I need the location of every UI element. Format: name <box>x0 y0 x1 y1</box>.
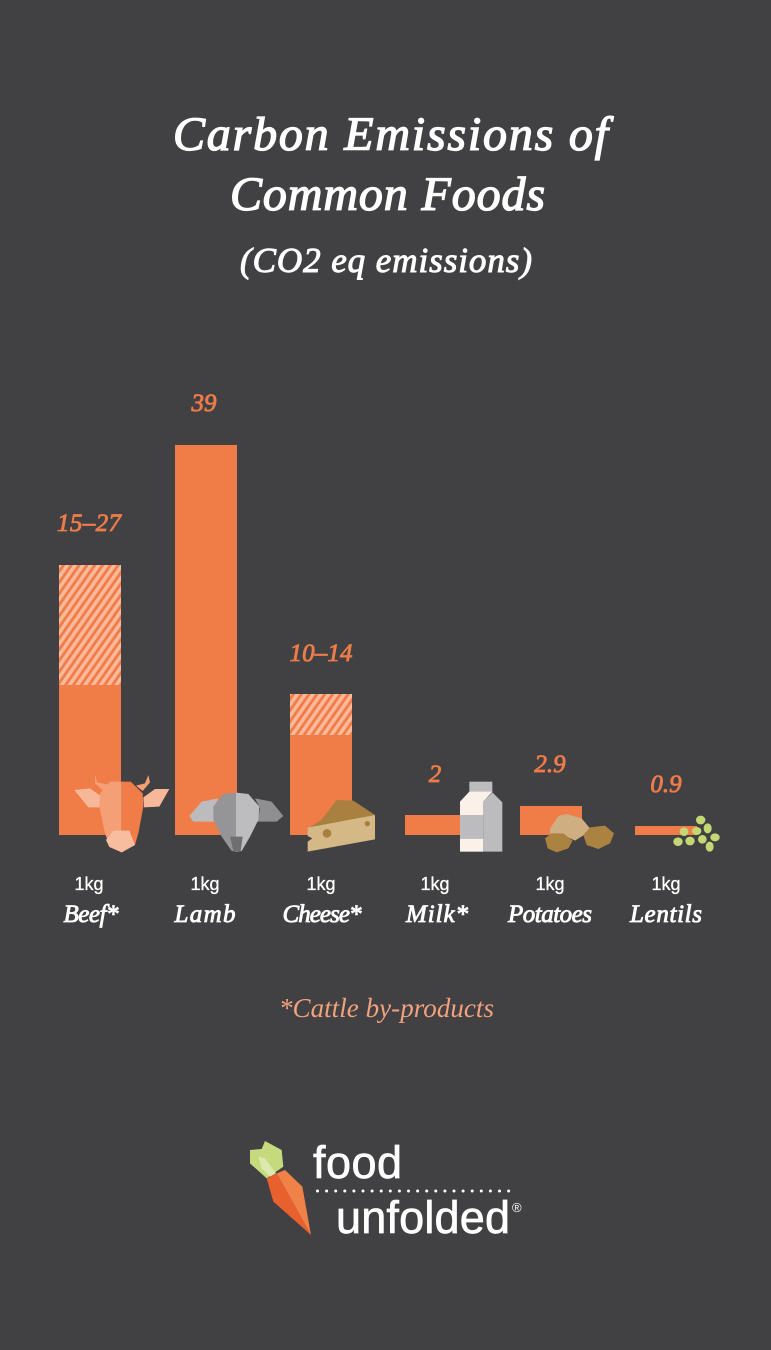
axis labels: Milk* <box>405 901 468 928</box>
icon: milk carton <box>460 782 502 852</box>
bar chart <box>57 390 697 835</box>
bar: milk <box>405 815 467 835</box>
value labels: 2 <box>429 761 441 788</box>
wordmark: food <box>313 1137 402 1188</box>
footnote: *Cattle by-products <box>279 993 494 1023</box>
axis labels: 1kg <box>535 874 565 894</box>
value labels: 2.9 <box>534 751 566 778</box>
axis labels: 1kg <box>190 874 220 894</box>
axis labels: Potatoes <box>507 901 592 928</box>
logo: food unfolded: ® <box>512 1200 522 1215</box>
icon: cheese <box>308 800 375 852</box>
title: Common Foods <box>230 168 545 221</box>
axis labels: 1kg <box>420 874 450 894</box>
icon: cow <box>74 774 169 852</box>
title: Carbon Emissions of <box>173 108 614 161</box>
axis labels: Cheese* <box>282 901 362 928</box>
icon: potatoes <box>545 814 614 852</box>
logo: food unfolded: unfolded <box>336 1192 510 1243</box>
bar: lentils <box>635 826 697 835</box>
value labels: 15–27 <box>57 510 122 537</box>
axis labels: 1kg <box>74 874 104 894</box>
value labels <box>57 390 682 798</box>
title <box>173 108 614 280</box>
value labels: 0.9 <box>650 771 682 798</box>
axis labels <box>64 874 702 928</box>
value labels: 10–14 <box>290 640 352 667</box>
bar: potatoes <box>520 806 582 835</box>
title: (CO2 eq emissions) <box>240 241 532 280</box>
logo: food unfolded <box>250 1137 522 1243</box>
axis labels: Beef* <box>64 901 119 928</box>
axis labels: 1kg <box>306 874 336 894</box>
icon: carrot <box>250 1141 311 1235</box>
axis labels: Lentils <box>629 901 702 928</box>
value labels: 39 <box>190 390 217 417</box>
icon: lentils <box>673 816 720 852</box>
axis labels: Lamb <box>174 901 236 928</box>
bar: lamb <box>175 445 237 835</box>
icon: sheep <box>189 793 283 852</box>
bar: cheese <box>290 694 352 835</box>
axis labels: 1kg <box>651 874 681 894</box>
bar: beef <box>59 565 121 835</box>
